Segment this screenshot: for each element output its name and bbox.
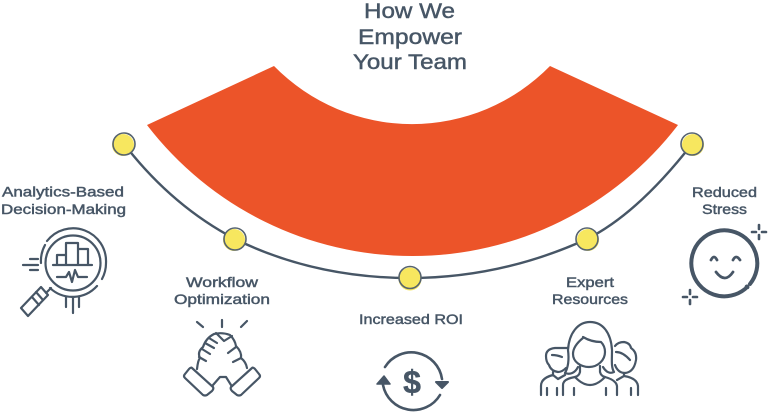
label: stress: Reduced: [692, 184, 757, 200]
icon: magnifier with chart: [21, 228, 106, 316]
label: workflow: Optimization: [174, 291, 270, 307]
label: analytics: Analytics-Based: [2, 184, 124, 200]
label: stress: Stress: [702, 201, 747, 217]
node 2: [223, 228, 246, 251]
title: Empower: [358, 26, 462, 49]
label: workflow: [174, 274, 270, 307]
icon: sparkle top: [752, 225, 766, 239]
timeline curve: [124, 144, 692, 278]
label: stress: [692, 184, 757, 217]
icon: handshake: [184, 320, 260, 396]
node 1: [112, 133, 135, 156]
node 4: [576, 228, 599, 251]
label: analytics: [1, 184, 126, 217]
title: [353, 0, 467, 74]
label: expert: [552, 274, 628, 307]
title: How We: [364, 0, 455, 23]
node 3: [398, 266, 422, 290]
label: workflow: Workflow: [186, 274, 259, 290]
node 5: [681, 133, 704, 156]
icon: sparkle bottom: [683, 290, 697, 304]
label: analytics: Decision-Making: [1, 201, 126, 217]
icon: smiley: [691, 230, 757, 296]
icon: dollar cycle: $: [403, 364, 421, 400]
label: expert: Expert: [566, 274, 614, 290]
orange arc band: [147, 66, 678, 256]
title: Your Team: [353, 51, 467, 74]
icon: team of people: [541, 322, 638, 395]
label: expert: Resources: [552, 291, 628, 307]
icon: dollar cycle: [377, 352, 448, 410]
label: roi: Increased ROI: [359, 311, 463, 327]
